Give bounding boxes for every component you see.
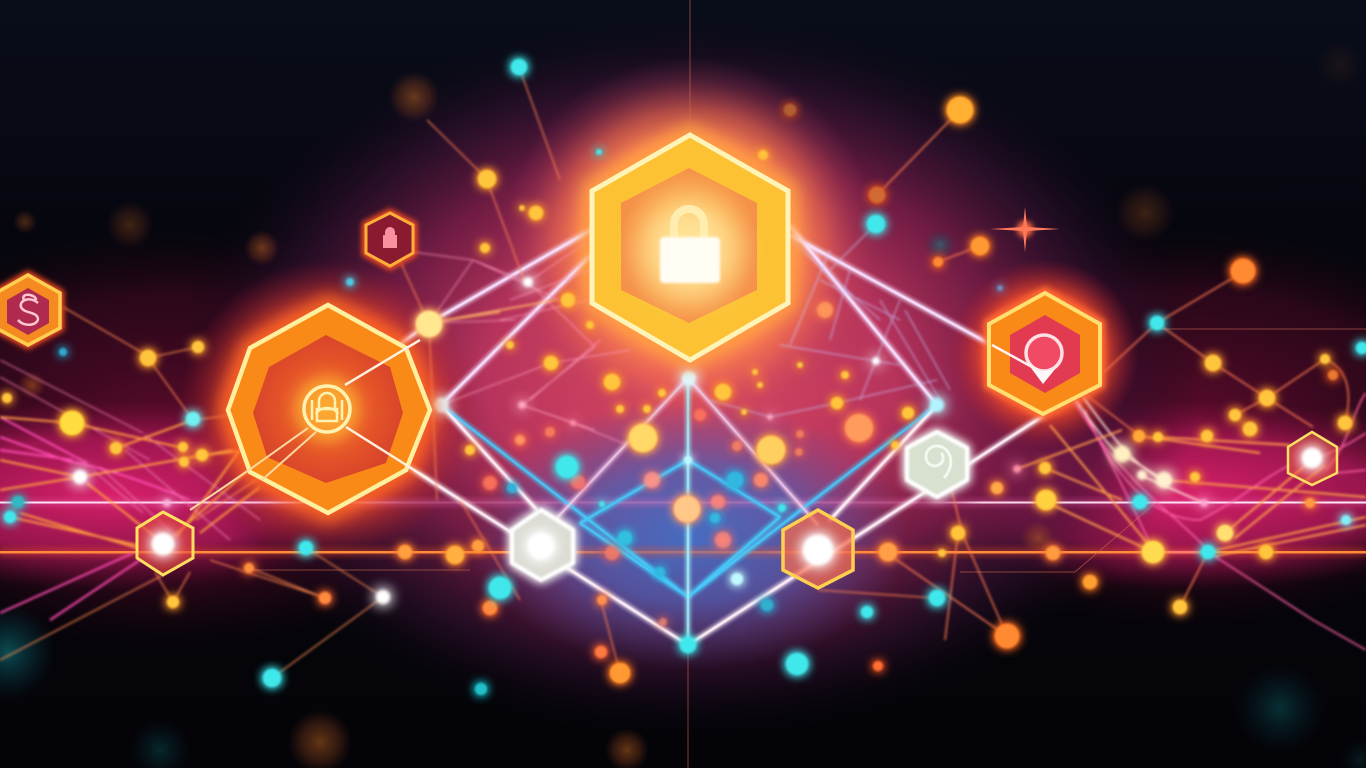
hexagon: right node xyxy=(1288,432,1337,485)
hexagon: lower left node xyxy=(137,512,193,575)
icon: padlock xyxy=(660,209,720,283)
hexagon: white pin node xyxy=(907,432,967,497)
left web of thin lines xyxy=(0,307,383,678)
icon: location pin xyxy=(1026,335,1062,384)
right web of thin lines xyxy=(877,110,1366,650)
scattered nodes: orange and yellow xyxy=(2,97,1352,683)
icon: lock in circle xyxy=(294,376,360,442)
icon: faint pin xyxy=(926,446,951,478)
octagon: left lock xyxy=(190,303,431,515)
scattered nodes: white xyxy=(73,277,1208,604)
hexagon: small padlock xyxy=(366,213,413,266)
icon: sparkle star xyxy=(990,207,1060,252)
hexagon: right location pin xyxy=(989,292,1100,415)
hexagon: lower centre right node xyxy=(783,510,853,588)
diamond network lines xyxy=(345,225,1043,645)
hexagon: left edge symbol xyxy=(0,275,60,345)
hexagon: lower centre left node xyxy=(512,510,573,580)
icon: letter-like symbol xyxy=(18,295,38,325)
hexagon: large padlock xyxy=(591,133,789,361)
icon: tiny padlock xyxy=(383,227,397,248)
fine mesh lines around the lock xyxy=(401,67,950,673)
